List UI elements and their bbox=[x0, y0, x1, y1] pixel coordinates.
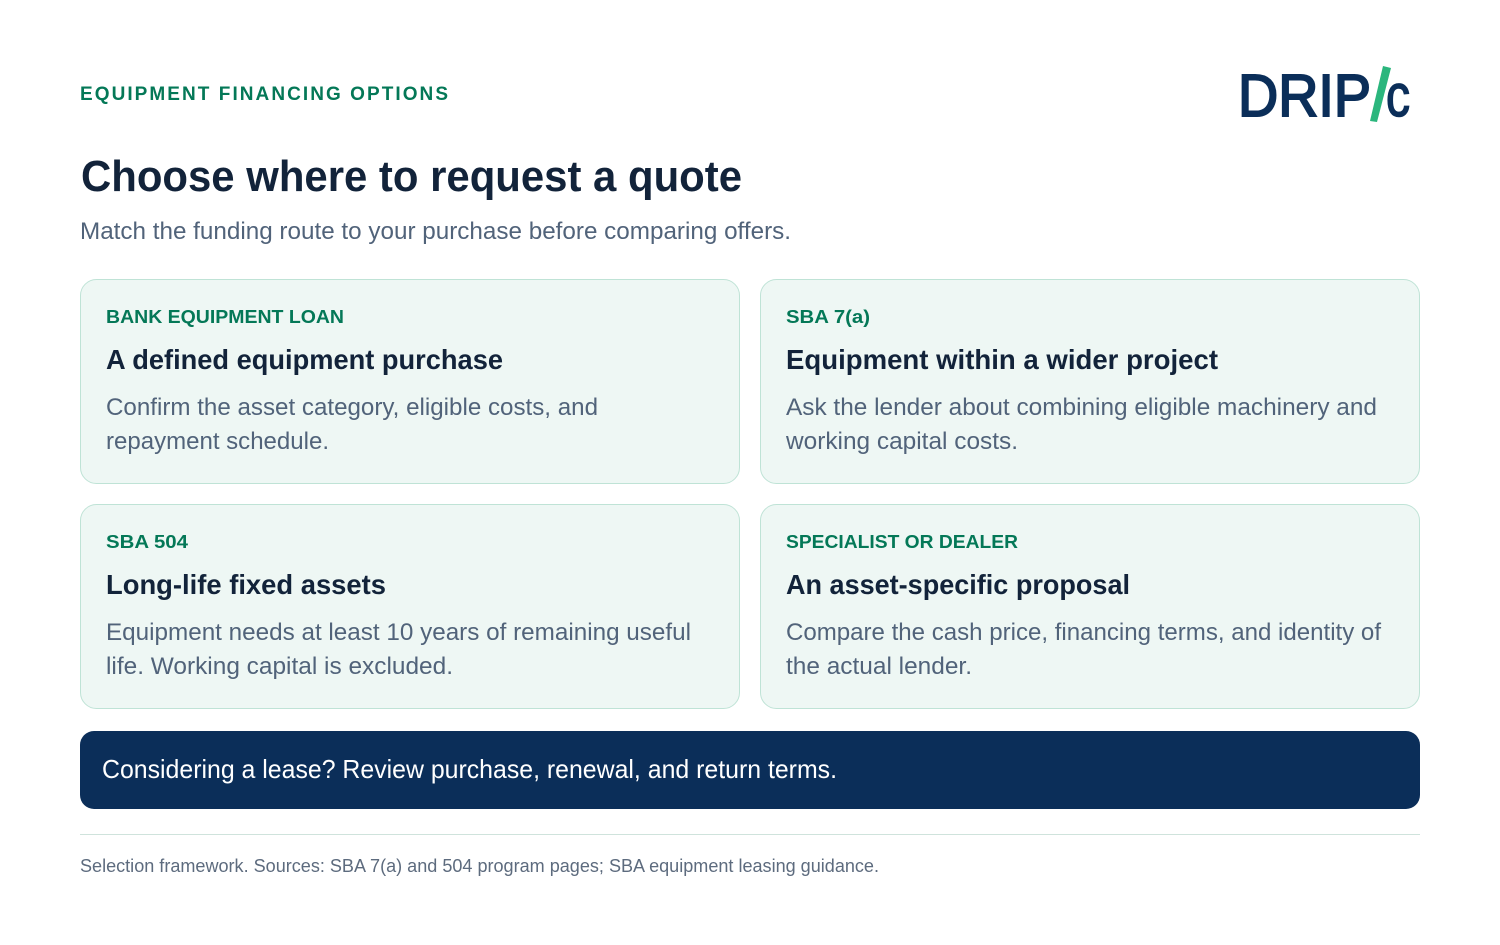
card heading: An asset-specific proposal bbox=[786, 569, 1130, 600]
card heading: Long-life fixed assets bbox=[106, 569, 386, 600]
subtitle: Match the funding route to your purchase before comparing offers. bbox=[80, 218, 791, 245]
card body: Equipment needs at least 10 years of remaining useful bbox=[106, 619, 691, 646]
card body: repayment schedule. bbox=[106, 428, 329, 455]
card body bbox=[786, 619, 1381, 680]
title: Choose where to request a quote bbox=[81, 152, 742, 201]
card label: BANK EQUIPMENT LOAN bbox=[106, 307, 344, 327]
card body bbox=[106, 619, 691, 680]
card body: the actual lender. bbox=[786, 653, 972, 680]
card body: life. Working capital is excluded. bbox=[106, 653, 453, 680]
logo: DRIP/c: DRIP bbox=[1238, 63, 1371, 129]
card body bbox=[785, 394, 1377, 455]
card label: SBA 504 bbox=[106, 532, 188, 552]
footer source note: Selection framework. Sources: SBA 7(a) and 504 program pages; SBA equipment leasing guidance. bbox=[80, 856, 879, 876]
callout: lease note bbox=[80, 731, 1420, 809]
panel: specialist or dealer bbox=[760, 504, 1420, 708]
card label: SPECIALIST OR DEALER bbox=[786, 532, 1018, 552]
callout: lease note: Considering a lease? Review purchase, renewal, and return terms. bbox=[102, 754, 837, 784]
card body: Confirm the asset category, eligible costs, and bbox=[106, 394, 598, 421]
panel: SBA 7(a) bbox=[760, 280, 1420, 484]
panel: bank equipment loan bbox=[80, 280, 740, 484]
card body: working capital costs. bbox=[785, 428, 1018, 455]
card body bbox=[106, 394, 598, 455]
card body: Compare the cash price, financing terms, and identity of bbox=[786, 619, 1381, 646]
card label: SBA 7(a) bbox=[786, 307, 870, 327]
eyebrow heading: EQUIPMENT FINANCING OPTIONS bbox=[80, 84, 448, 105]
panel: SBA 504 bbox=[80, 504, 740, 708]
card heading: A defined equipment purchase bbox=[106, 344, 503, 375]
logo: DRIP/c: c bbox=[1386, 63, 1410, 129]
card heading: Equipment within a wider project bbox=[786, 344, 1218, 375]
card body: Ask the lender about combining eligible machinery and bbox=[786, 394, 1377, 421]
